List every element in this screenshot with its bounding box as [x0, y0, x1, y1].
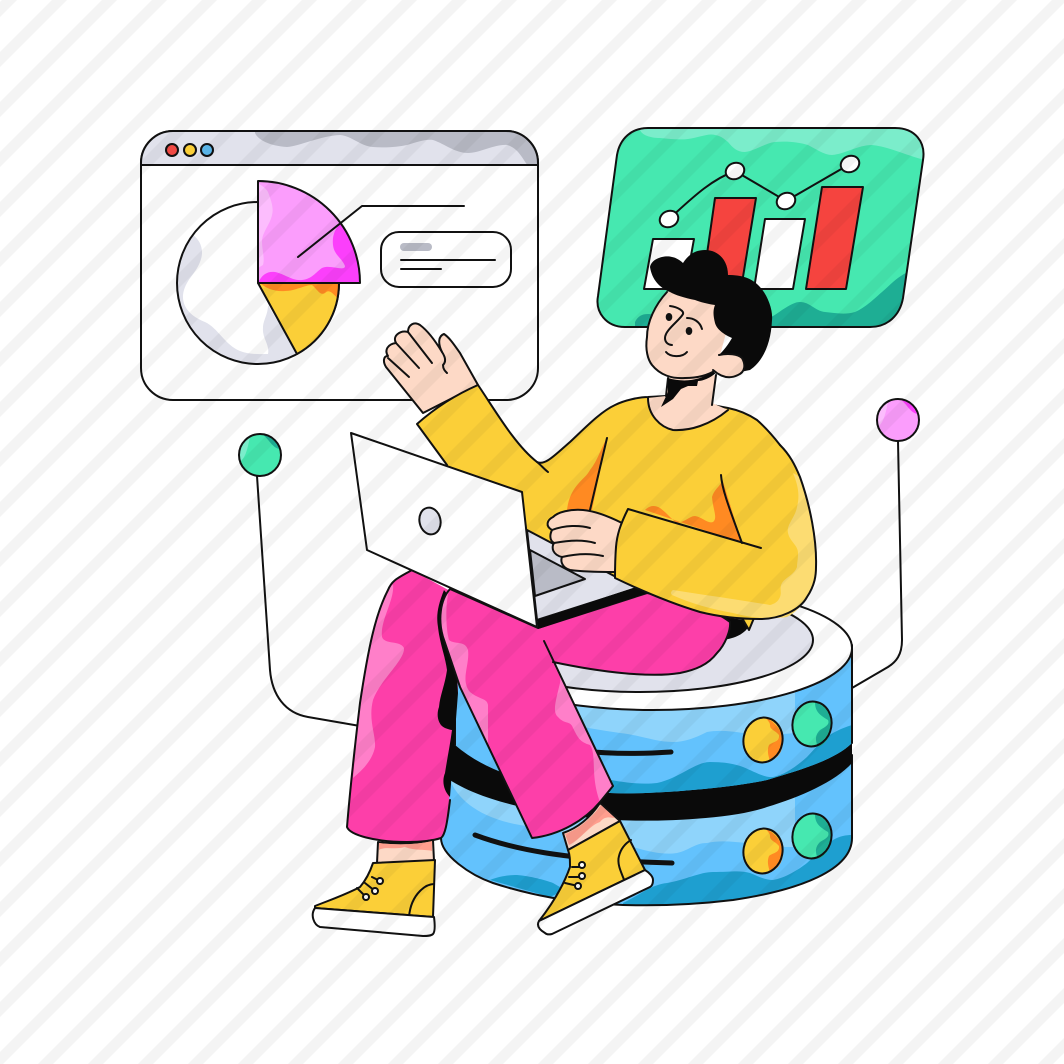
front ankle [563, 803, 620, 850]
hair [650, 250, 772, 372]
neck [648, 372, 728, 430]
panel: browser window with pie chart [141, 128, 540, 400]
front sleeve [615, 445, 816, 619]
front leg and thigh [440, 589, 730, 838]
lower hand [548, 510, 622, 572]
black shadow under thigh [722, 617, 754, 640]
head [646, 250, 772, 378]
window title bar [141, 128, 540, 166]
connector: green node [239, 434, 360, 726]
back shoe [313, 860, 435, 936]
status light: orange [740, 825, 786, 877]
upper disk [455, 645, 852, 793]
pie chart [177, 181, 360, 364]
sweater torso [417, 385, 816, 619]
back ankle [377, 840, 434, 863]
eyes and nose [665, 306, 702, 345]
status light: orange [740, 714, 786, 766]
status light: green [789, 698, 835, 750]
black separator band [450, 738, 852, 821]
panel: green bar and line chart card [598, 125, 925, 330]
back leg [347, 570, 458, 842]
laptop base [527, 530, 637, 620]
smile [666, 352, 687, 356]
bars [644, 187, 863, 289]
laptop logo [417, 506, 443, 536]
database cylinder [441, 586, 852, 905]
status light: green [789, 810, 835, 862]
leader line [298, 206, 464, 257]
laptop underside [537, 587, 650, 629]
black shadow between legs [437, 590, 458, 797]
person [313, 250, 816, 936]
lower disk [441, 755, 852, 905]
raised hand [384, 323, 478, 413]
front shoe [538, 821, 653, 934]
connector: pink node [852, 399, 919, 688]
top surface [454, 586, 852, 710]
keyboard [530, 550, 585, 596]
ear [713, 354, 744, 377]
laptop lid [351, 433, 537, 627]
laptop [351, 433, 650, 629]
callout box [381, 232, 511, 287]
trend line [657, 153, 862, 230]
